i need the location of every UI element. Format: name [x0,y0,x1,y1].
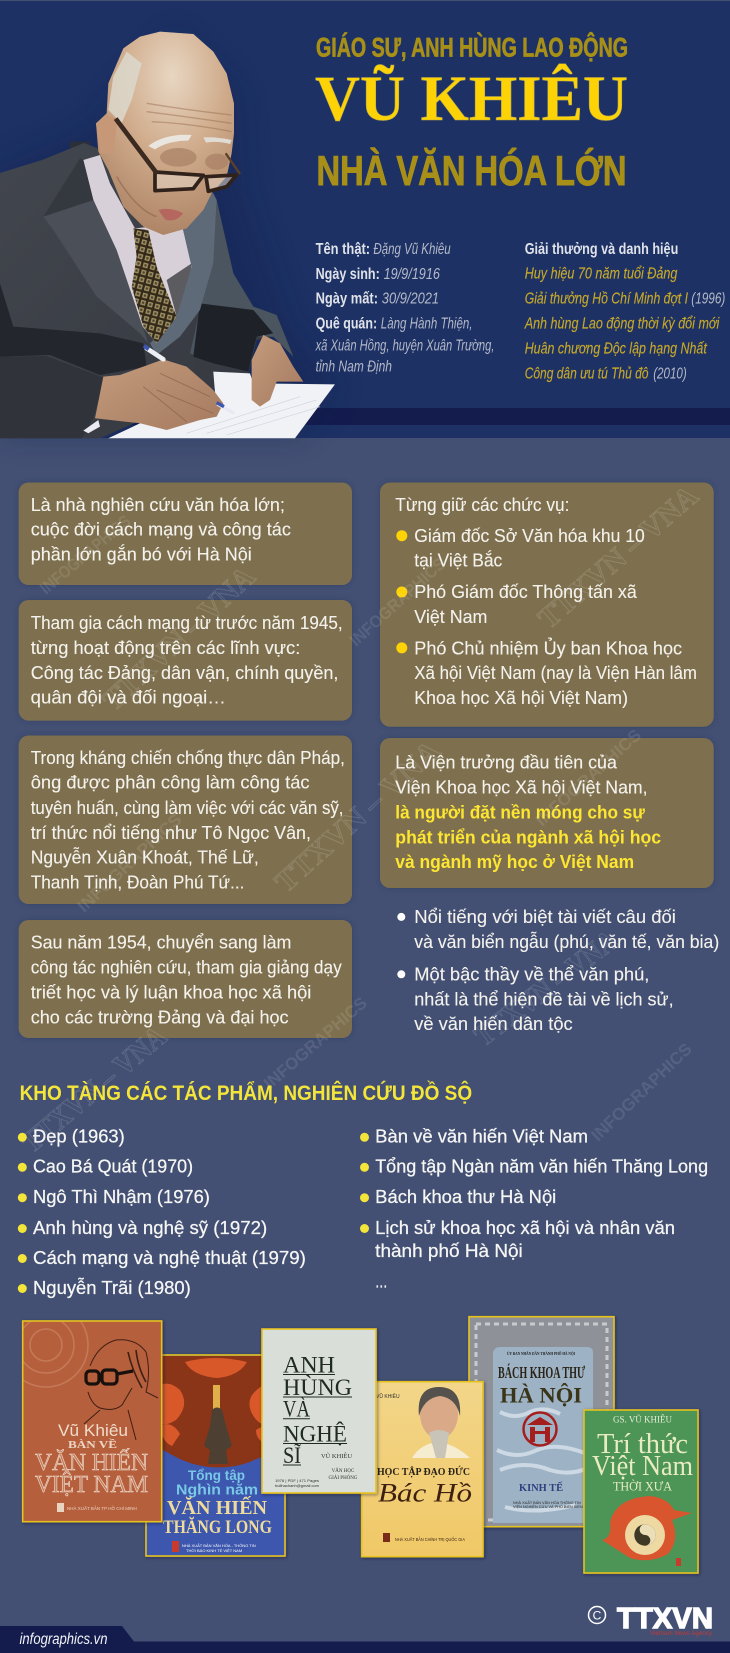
book cover: Trí thức Việt Nam thời xưa: GS. VŨ KHIÊU [613,1415,672,1425]
book cover: Anh hùng và nghệ sĩ: VÀ [283,1397,310,1422]
watermarks: TTXVN – VNA [468,924,624,1053]
bullet: yellow [396,642,407,653]
biography facts: Làng Hành Thiện, [381,315,472,332]
book cover: Vũ Khiêu bàn về văn hiến Việt Nam: Vũ Khiêu [58,1421,128,1440]
panel: positions held: Từng giữ các chức vụ: [395,494,569,515]
panel: revolutionary activity: Công tác Đảng, dân vận, chính quyền, [31,662,338,683]
watermarks: TTXVN – VNA [532,479,705,635]
watermarks: TTXVN – VNA [96,560,262,717]
book cover: Văn hiến Thăng Long: Nghìn năm [176,1482,258,1498]
text block: literary talents [397,906,719,1034]
biography facts: Quê quán: [316,315,377,332]
biography facts: Tên thật: [316,241,370,258]
book cover: Anh hùng và nghệ sĩ: NGHỆ [283,1422,347,1447]
list: works left column: Cao Bá Quát (1970) [33,1157,193,1177]
panel: resistance war years: tuyên huấn, cùng làm việc với các văn sỹ, [31,797,343,818]
book cover: Văn hiến Thăng Long: THĂNG LONG [163,1516,272,1538]
book cover: Bách khoa thư Hà Nội [469,1317,614,1527]
book cover: Vũ Khiêu bàn về văn hiến Việt Nam: BÀN VỀ [68,1438,117,1451]
book cover: Trí thức Việt Nam thời xưa: Việt Nam [592,1451,693,1482]
biography facts: tỉnh Nam Định [316,358,392,375]
watermarks: INFOGRAPHICS [346,554,449,650]
biography facts: 19/9/1916 [384,266,440,283]
book cover: Học tập đạo đức Bác Hồ: Bác Hồ [378,1479,472,1508]
book cover: Bách khoa thư Hà Nội: VIỆN NGHIÊN CỨU VÀ PHỔ BIẾN KIẾN THỨC [513,1504,595,1509]
book cover: Trí thức Việt Nam thời xưa: Trí thức [597,1429,688,1460]
book cover: Học tập đạo đức Bác Hồ: HỌC TẬP ĐẠO ĐỨC [377,1465,470,1478]
watermarks: INFOGRAPHICS [588,1040,696,1145]
list: works left column: Ngô Thì Nhậm (1976) [33,1187,210,1207]
book cover: Văn hiến Thăng Long: VĂN HIẾN [167,1495,268,1519]
bullet: yellow [396,530,407,541]
panel: revolutionary activity [19,600,352,721]
book cover: Anh hùng và nghệ sĩ: ANH [283,1353,335,1378]
list: works left column [18,1127,306,1298]
book cover: Anh hùng và nghệ sĩ: 1976 | PDF | 471 Pages [275,1478,319,1483]
panel: resistance war years: Nguyễn Xuân Khoát, Thế Lữ, [31,847,259,868]
list: works left column: Đẹp (1963) [33,1127,125,1147]
book cover: Trí thức Việt Nam thời xưa [584,1410,698,1573]
panel: first institute director: Viện Khoa học Xã hội Việt Nam, [395,776,648,797]
panel: revolutionary activity: Tham gia cách mạng từ trước năm 1945, [31,612,343,633]
title: third line: NHÀ VĂN HÓA LỚN [316,146,626,194]
biography facts [315,241,494,375]
list: works right column [360,1127,708,1292]
book cover: Bách khoa thư Hà Nội: HÀ NỘI [500,1383,582,1408]
panel: positions held: Xã hội Việt Nam (nay là Viện Hàn lâm [414,662,697,683]
book cover: Học tập đạo đức Bác Hồ: VŨ KHIÊU [376,1392,400,1400]
panel: positions held: Việt Nam [414,606,487,627]
list: works right column: ... [375,1272,387,1292]
panel: first institute director: là người đặt nền móng cho sự [395,802,645,822]
panel: positions held: Khoa học Xã hội Việt Nam) [414,687,628,708]
book cover: Văn hiến Thăng Long [146,1355,285,1556]
book cover: Anh hùng và nghệ sĩ: VŨ KHIÊU [321,1452,352,1460]
awards and titles: Công dân ưu tú Thủ đô [525,365,649,382]
panel: resistance war years: ông được phân công làm công tác [31,772,310,793]
biography facts: 30/9/2021 [382,290,439,307]
list: works left column: Nguyễn Trãi (1980) [33,1277,191,1298]
book cover: Anh hùng và nghệ sĩ: HÙNG [283,1374,352,1400]
watermarks [15,479,705,1159]
text block: literary talents: và văn biển ngẫu (phú, văn tế, văn bia) [414,931,719,952]
glow behind figure [0,30,340,438]
list: works right column: Bách khoa thư Hà Nội [375,1187,556,1207]
watermarks: INFOGRAPHICS [36,512,134,598]
panel: positions held [380,482,714,727]
book cover: Vũ Khiêu bàn về văn hiến Việt Nam: NHÀ XUẤT BẢN TP HỒ CHÍ MINH [67,1505,137,1511]
list: works right column: Lịch sử khoa học xã hội và nhân văn [375,1218,675,1238]
text block: literary talents: Một bậc thầy về thể văn phú, [414,963,649,984]
book cover: Anh hùng và nghệ sĩ: buithachanh@gmail.com [275,1483,320,1488]
panel: positions held: Phó Giám đốc Thông tấn xã [414,581,637,602]
panel: after 1954: công tác nghiên cứu, tham gia giảng dạy [31,956,342,978]
title block [315,32,628,194]
book cover: Học tập đạo đức Bác Hồ: NHÀ XUẤT BẢN CHÍNH TRỊ QUỐC GIA [395,1536,465,1542]
panel: cultural researcher [19,482,352,585]
footer strip with site tab [0,1626,730,1653]
bullet: yellow [396,586,407,598]
panel: after 1954: triết học và lý luận khoa học xã hội [31,981,311,1002]
panel: header band [0,1,730,438]
book cover: Anh hùng và nghệ sĩ: SĨ [283,1443,301,1468]
awards and titles: Giải thưởng và danh hiệu [525,241,678,258]
book cover: Vũ Khiêu bàn về văn hiến Việt Nam: VIỆT NAM [35,1472,148,1498]
panel: first institute director: phát triển của ngành xã hội học [395,826,661,847]
list: works right column: Bàn về văn hiến Việt Nam [375,1127,588,1147]
head and glasses [96,32,240,235]
logo: TTXVN: TTXVN [617,1603,713,1635]
list: works left column: Cách mạng và nghệ thuật (1979) [33,1248,306,1268]
awards and titles: (2010) [653,365,687,382]
panel: after 1954: cho các trường Đảng và đại học [31,1006,289,1027]
panel: resistance war years: Thanh Tịnh, Đoàn Phú Tứ... [31,872,244,893]
list: works right column: thành phố Hà Nội [375,1241,523,1261]
biography facts: Ngày sinh: [316,266,380,283]
text block: literary talents: Nổi tiếng với biệt tài viết câu đối [414,906,676,927]
book cover: Vũ Khiêu bàn về văn hiến Việt Nam: VĂN HIẾN [35,1449,148,1476]
panel: resistance war years [19,736,352,904]
panel: resistance war years: trí thức nổi tiếng như Tô Ngọc Vân, [31,822,311,843]
awards and titles [524,241,725,382]
book cover: Anh hùng và nghệ sĩ [262,1329,376,1493]
list: works left column: Anh hùng và nghệ sỹ (1972) [33,1218,267,1238]
torso and hands [0,142,335,438]
book cover: Anh hùng và nghệ sĩ: GIẢI PHÓNG [328,1475,358,1481]
book cover: Học tập đạo đức Bác Hồ [362,1382,483,1557]
heading: works and research: KHO TÀNG CÁC TÁC PHẨM, NGHIÊN CỨU ĐỒ SỘ [20,1080,472,1105]
panel: revolutionary activity: quân đội và đối ngoại… [31,687,226,708]
panel: after 1954: Sau năm 1954, chuyển sang làm [31,932,291,953]
panel: revolutionary activity: từng hoạt động trên các lĩnh vực: [31,637,300,658]
book cover: Bách khoa thư Hà Nội: KINH TẾ [519,1481,563,1494]
book cover: Bách khoa thư Hà Nội: BÁCH KHOA THƯ [498,1363,585,1382]
copyright mark: C [593,1608,602,1622]
watermarks: INFOGRAPHICS [532,726,645,830]
book cover: Văn hiến Thăng Long: NHÀ XUẤT BẢN VĂN HÓA - THÔNG TIN [182,1543,256,1548]
panel: resistance war years: Trong kháng chiến chống thực dân Pháp, [31,747,345,768]
panel: positions held: Giám đốc Sở Văn hóa khu 10 [414,525,645,546]
book cover: Bách khoa thư Hà Nội: ỦY BAN NHÂN DÂN THÀNH PHỐ HÀ NỘI [507,1351,575,1356]
book cover: Văn hiến Thăng Long: THỜI BÁO KINH TẾ VIỆT NAM [186,1548,242,1553]
watermarks: TTXVN – VNA [15,1019,173,1159]
title: name: VŨ KHIÊU [315,63,628,135]
panel: first institute director: và ngành mỹ học ở Việt Nam [395,851,634,872]
panel: cultural researcher: cuộc đời cách mạng và công tác [31,519,291,540]
text block: literary talents: về văn hiến dân tộc [414,1013,573,1034]
biography facts: xã Xuân Hồng, huyện Xuân Trường, [315,338,494,355]
panel: cultural researcher: Là nhà nghiên cứu văn hóa lớn; [31,494,285,515]
panel: positions held: tại Việt Bắc [414,550,502,571]
panel: first institute director [380,738,714,888]
watermarks: TTXVN – VNA [269,734,447,899]
watermarks: INFOGRAPHICS [260,993,371,1093]
panel: after 1954 [19,920,352,1038]
book cover: Anh hùng và nghệ sĩ: VĂN HỌC [332,1468,355,1474]
awards and titles: Huy hiệu 70 năm tuổi Đảng [525,264,677,282]
portrait of Professor Vũ Khiêu writing [0,30,340,438]
logo: TTXVN: Vietnam News Agency [650,1631,712,1637]
book cover: Trí thức Việt Nam thời xưa: THỜI XƯA [613,1479,673,1494]
panel: cultural researcher: phần lớn gắn bó với Hà Nội [31,544,252,565]
panel: first institute director: Là Viện trưởng đầu tiên của [395,751,618,772]
text block: literary talents: nhất là thể hiện đề tài về lịch sử, [414,988,674,1009]
watermarks: INFOGRAPHICS [74,810,185,916]
panel: positions held: Phó Chủ nhiệm Ủy ban Khoa học [414,637,682,658]
biography facts: Đặng Vũ Khiêu [373,241,451,258]
book cover: Bách khoa thư Hà Nội: NHÀ XUẤT BẢN VĂN HÓA THÔNG TIN [513,1500,581,1505]
footer strip with site tab: infographics.vn [20,1631,108,1648]
biography facts: Ngày mất: [316,290,378,307]
book cover: Văn hiến Thăng Long: Tổng tập [188,1467,245,1483]
list: works right column: Tổng tập Ngàn năm văn hiến Thăng Long [375,1157,708,1177]
book cover: Vũ Khiêu bàn về văn hiến Việt Nam [22,1320,166,1526]
